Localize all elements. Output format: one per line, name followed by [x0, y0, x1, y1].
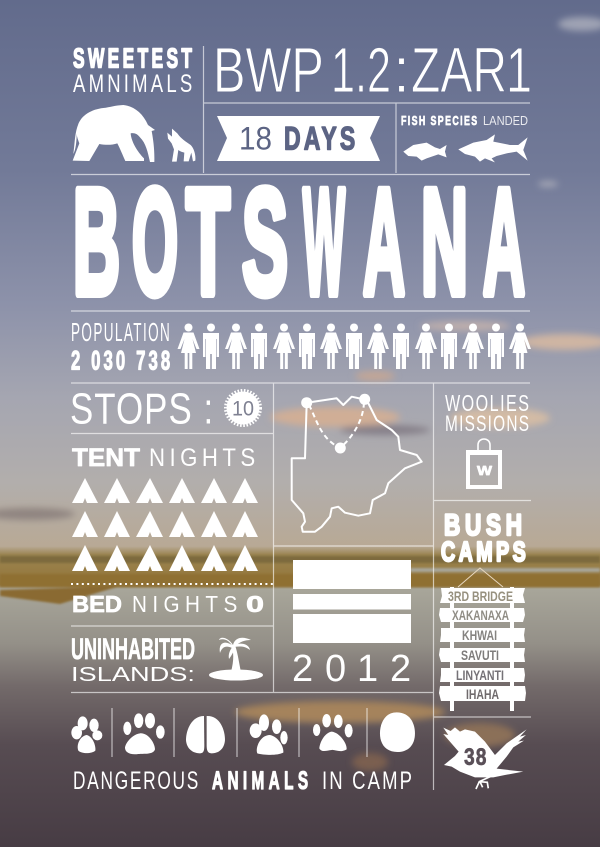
exchange rate: BWP [213, 34, 323, 106]
icon: palm island [209, 638, 263, 680]
icon: shopping bag: W [477, 463, 493, 478]
population figures: POPULATION [71, 318, 170, 347]
caption: dangerous animals in camp: IN CAMP [322, 766, 412, 795]
icon row: male and female people [178, 324, 531, 369]
heading: bed nights 0: 0 [246, 591, 264, 617]
map of Botswana with route [292, 394, 422, 532]
title: Botswana: A [363, 158, 405, 326]
grid divider lines [71, 46, 531, 790]
heading: bed nights 0: NIGHTS [132, 591, 237, 617]
signpost: bush camp names: SAVUTI [461, 647, 499, 663]
signpost: bush camp names: IHAHA [466, 686, 499, 702]
heading: woolies missions: MISSIONS [445, 412, 529, 437]
heading: bush camps [441, 508, 526, 568]
heading: uninhabited islands: ISLANDS: [71, 664, 195, 686]
title: Botswana: S [242, 158, 288, 326]
icon: shopping bag [466, 439, 502, 489]
population figures [71, 318, 170, 376]
heading: sweetest amnimals: AMNIMALS [73, 69, 192, 98]
heading: tent nights: TENT [72, 444, 140, 472]
flag of Botswana [293, 560, 411, 643]
heading: bush camps: BUSH [444, 508, 522, 542]
signpost: bush camp names: LINYANTI [456, 667, 504, 683]
heading: bed nights 0: BED [72, 591, 122, 617]
heading: woolies missions [445, 391, 529, 437]
title: Botswana: T [186, 158, 230, 326]
icon: paw track 3 [250, 714, 288, 755]
ribbon: 18 days [217, 116, 380, 161]
icon: round elephant track [380, 712, 415, 752]
icon: paw track 2 [123, 713, 165, 754]
heading: woolies missions: WOOLIES [445, 391, 529, 417]
heading: fish species landed: FISH SPECIES [401, 114, 477, 129]
signpost: bush camp names: XAKANAXA [452, 607, 509, 623]
icon: hoof track [186, 716, 225, 753]
stops count: 10 [232, 398, 254, 420]
exchange rate: 1 [506, 34, 532, 106]
dotted divider [71, 583, 274, 585]
title: Botswana: O [132, 158, 178, 326]
caption: dangerous animals in camp: ANIMALS [212, 767, 308, 795]
heading: bush camps: CAMPS [441, 537, 526, 568]
icon grid: tents [72, 478, 258, 571]
text: A [483, 158, 525, 326]
animal tracks row [71, 712, 415, 755]
caption: dangerous animals in camp [73, 766, 412, 795]
icon: bird with 38 species [443, 727, 527, 789]
icon: small fish [403, 143, 447, 161]
stops count: STOPS : [70, 385, 213, 433]
heading: fish species landed: LANDED [483, 113, 528, 128]
icon: bird with 38 species: 38 [464, 743, 486, 771]
exchange rate: ZAR [411, 34, 507, 106]
icon: large fish [458, 134, 528, 162]
icon: paw track 4 [313, 714, 353, 751]
caption: dangerous animals in camp: DANGEROUS [73, 767, 198, 795]
exchange rate: 1.2 [331, 34, 391, 106]
year: 2012 [292, 648, 411, 690]
icon: elephant [73, 105, 155, 162]
heading: bed nights 0 [72, 591, 264, 617]
title: Botswana: N [421, 158, 468, 326]
heading: tent nights [72, 444, 255, 472]
icon: wild dog [167, 129, 195, 162]
heading: tent nights: NIGHTS [149, 444, 255, 471]
heading: uninhabited islands: UNINHABITED [71, 633, 195, 666]
ribbon: 18 days: DAYS [284, 121, 355, 156]
population figures: 2 030 738 [71, 345, 170, 376]
exchange rate: : [393, 34, 410, 106]
title: Botswana: B [73, 158, 120, 326]
signpost: bush camp names: KHWAI [462, 627, 497, 643]
signpost: bush camp names [439, 568, 526, 711]
signpost: bush camp names: 3RD BRIDGE [448, 588, 513, 604]
ribbon: 18 days: 18 [239, 120, 272, 156]
title: Botswana: W [303, 158, 345, 326]
heading: sweetest amnimals: SWEETEST [73, 42, 192, 74]
heading: sweetest amnimals [73, 42, 192, 98]
heading: fish species landed [401, 113, 528, 129]
heading: uninhabited islands [71, 633, 195, 686]
icon: paw track 1 [71, 716, 102, 753]
